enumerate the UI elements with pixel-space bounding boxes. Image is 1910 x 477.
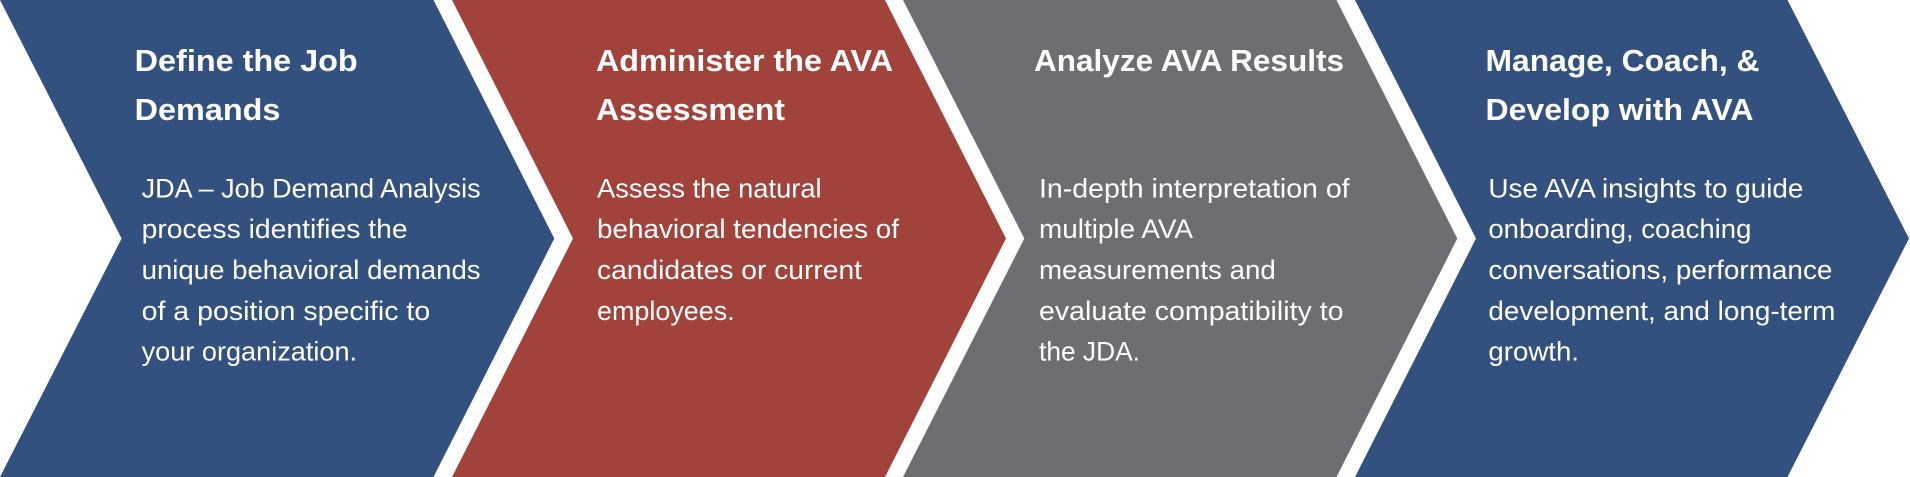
panel: analyze AVA results [903, 0, 1457, 477]
text block: development description: conversations, performance [1488, 255, 1832, 285]
text block: assessment description: Assess the natural [597, 173, 822, 203]
heading: define the job demands: Define the Job [135, 44, 358, 78]
heading: define the job demands [135, 44, 358, 127]
text block: JDA description: process identifies the [142, 214, 408, 244]
text block: assessment description: behavioral tendencies of [597, 214, 900, 244]
heading: manage, coach, and develop with AVA: Manage, Coach, & [1486, 44, 1760, 78]
text block: results description: measurements and [1039, 255, 1276, 285]
chevron: blue step 1 [0, 0, 554, 477]
text block: results description: the JDA. [1039, 337, 1140, 367]
heading: administer the AVA assessment: Administer the AVA [596, 44, 893, 78]
heading: manage, coach, and develop with AVA [1486, 44, 1760, 127]
text block: results description: evaluate compatibility to [1039, 296, 1344, 326]
heading: administer the AVA assessment: Assessment [596, 93, 785, 127]
text block: JDA description: unique behavioral demands [142, 255, 481, 285]
text block: development description: growth. [1488, 337, 1579, 367]
heading: define the job demands: Demands [135, 93, 280, 127]
text block: development description: onboarding, coaching [1488, 214, 1751, 244]
heading: manage, coach, and develop with AVA: Develop with AVA [1486, 93, 1754, 127]
chevron: blue step 4 [1355, 0, 1909, 477]
text block: JDA description: of a position specific to [142, 296, 430, 326]
panel: administer the AVA assessment [452, 0, 1006, 477]
heading: analyze AVA results: Analyze AVA Results [1034, 44, 1344, 78]
text block: results description [1039, 173, 1350, 367]
panel: define the job demands [0, 0, 554, 477]
chevron: grey step 3 [903, 0, 1457, 477]
text block: JDA description [142, 173, 481, 367]
text block: assessment description: candidates or current [597, 255, 863, 285]
text block: results description: multiple AVA [1039, 214, 1193, 244]
text block: development description [1488, 173, 1835, 367]
text block: development description: Use AVA insights to guide [1488, 173, 1803, 203]
chevron: red step 2 [452, 0, 1006, 477]
panel: manage, coach, and develop with AVA [1355, 0, 1909, 477]
text block: development description: development, and long-term [1488, 296, 1835, 326]
text block: assessment description [597, 173, 900, 326]
text block: JDA description: JDA – Job Demand Analysis [142, 173, 481, 203]
text block: results description: In-depth interpretation of [1039, 173, 1350, 203]
text block: assessment description: employees. [597, 296, 735, 326]
heading: administer the AVA assessment [596, 44, 893, 127]
text block: JDA description: your organization. [142, 337, 357, 367]
